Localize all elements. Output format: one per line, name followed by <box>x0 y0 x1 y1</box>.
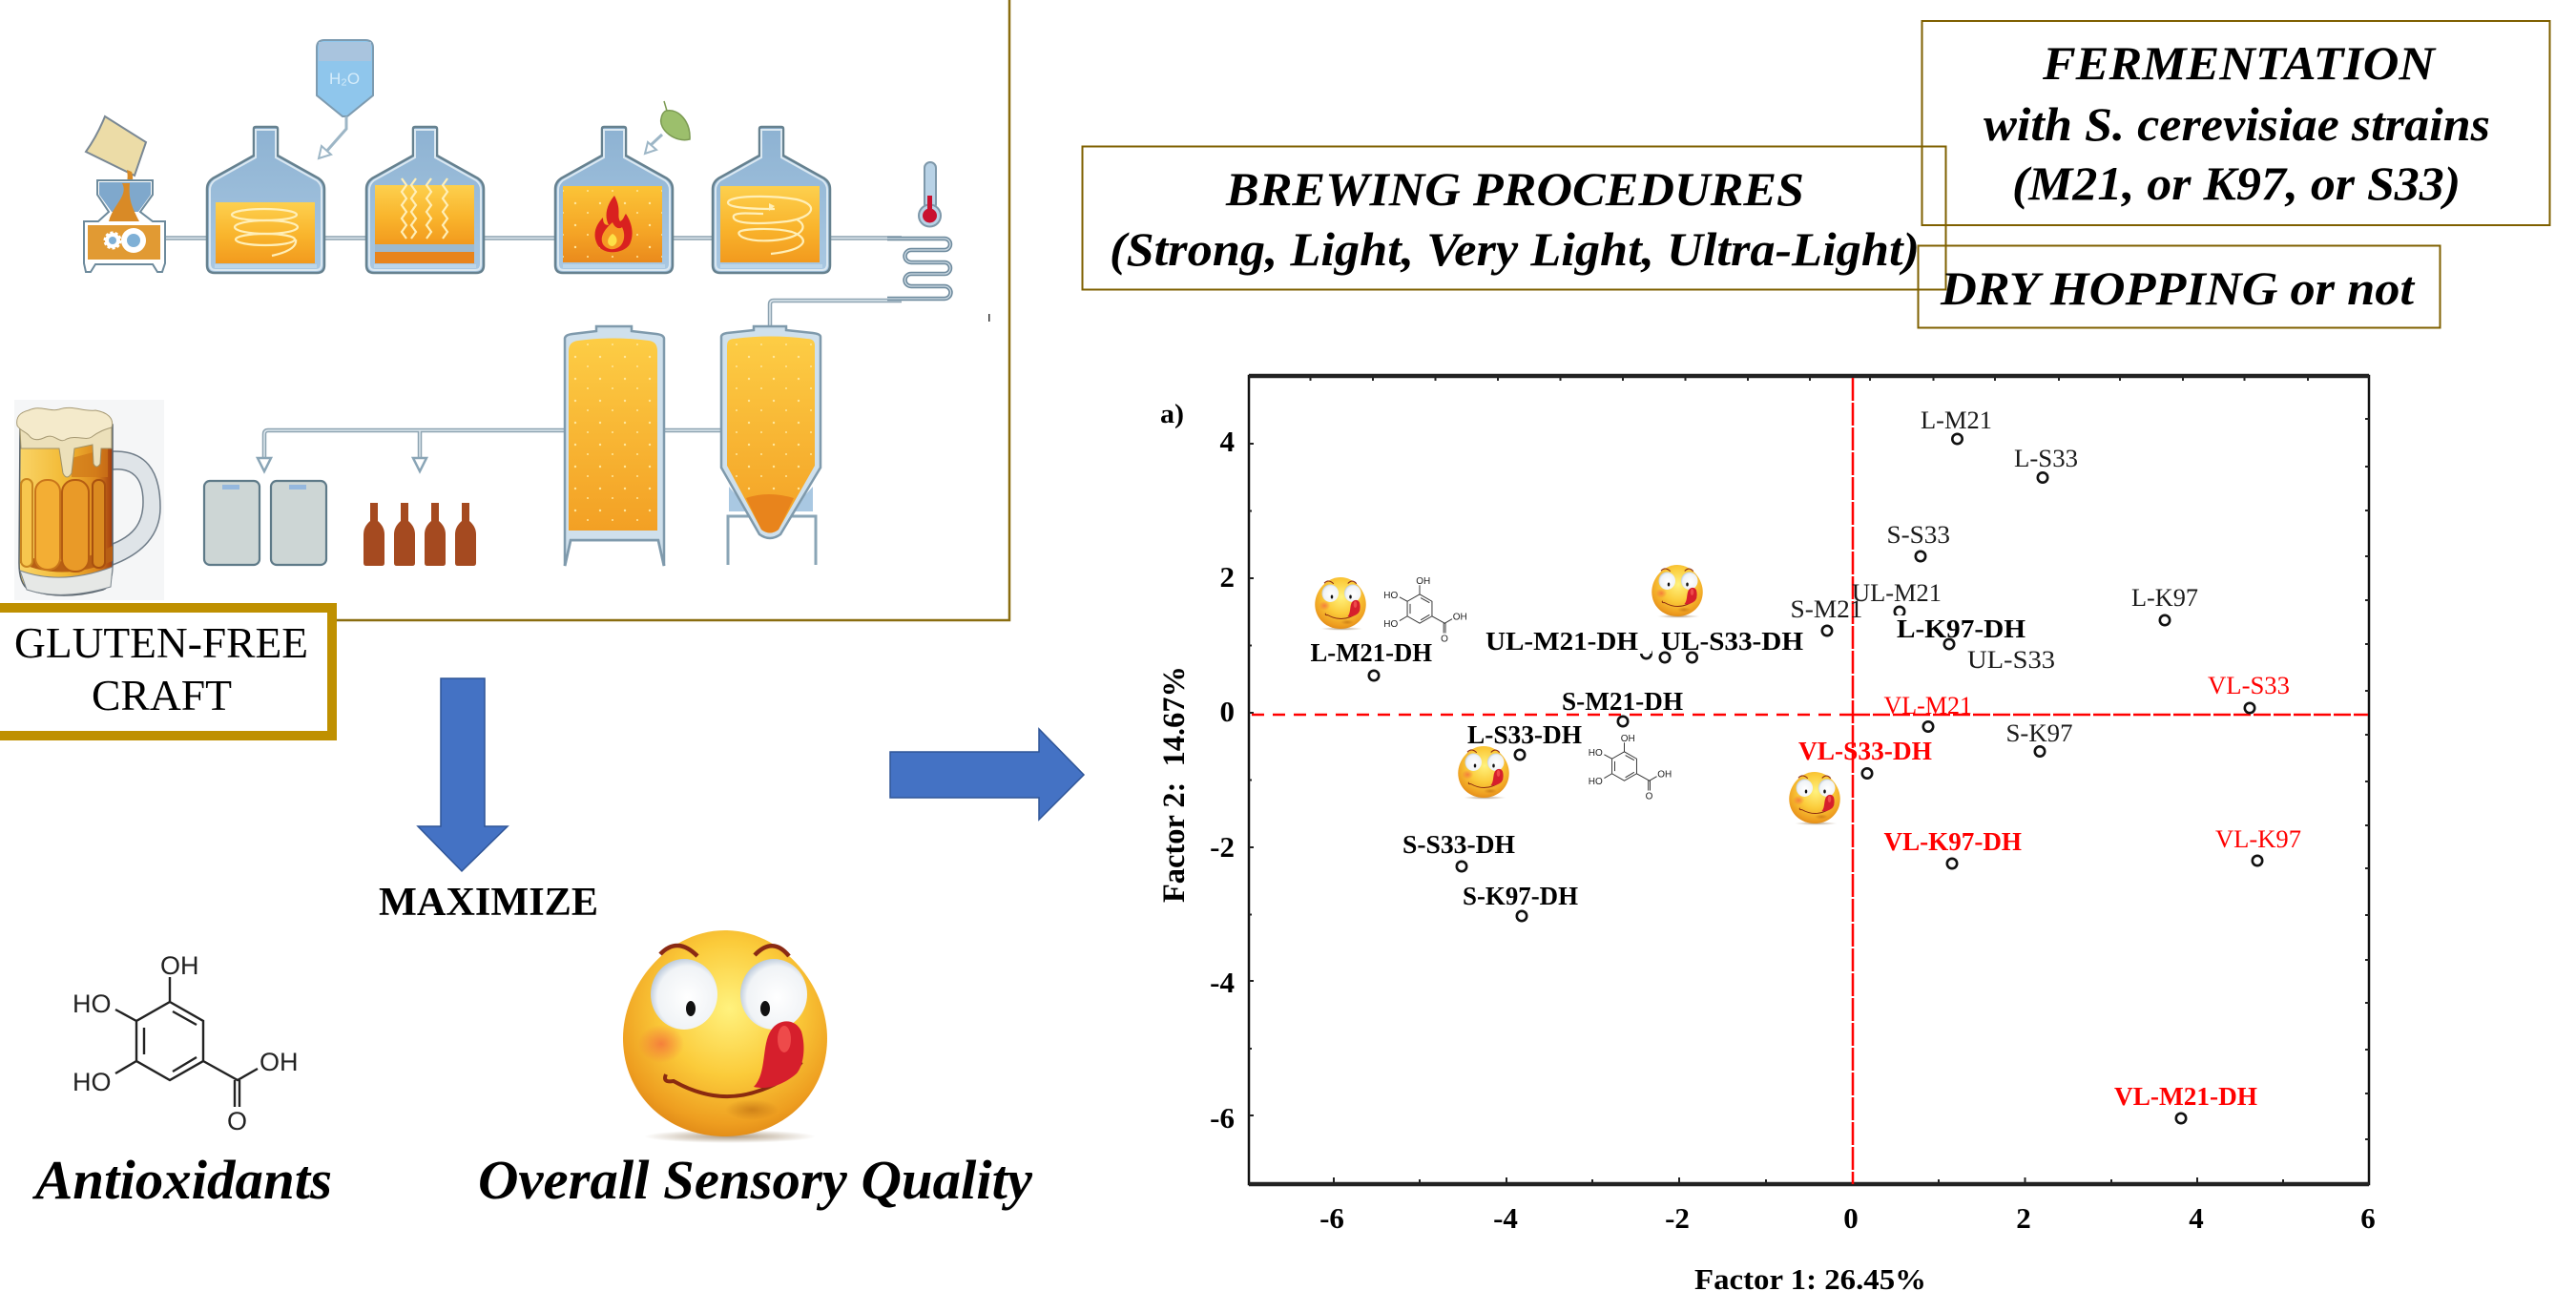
sample labels: regular: S-K97 <box>2005 719 2072 747</box>
icon: gallic acid molecule large: OH <box>160 951 198 980</box>
icon: grain sack <box>86 116 146 214</box>
icon: large smiley <box>623 930 827 1143</box>
vessel: conical fermenter <box>721 326 821 565</box>
x axis title: Factor 1: 26.45% <box>1694 1262 1926 1296</box>
icon: small gallic acid near L-M21-DH: OH <box>1416 576 1430 587</box>
pipes: brewhouse line <box>164 239 902 458</box>
icon: cooling coil <box>887 239 950 299</box>
x axis tick labels: 6 <box>2360 1201 2376 1235</box>
sample labels: dry-hopped bold <box>1311 614 2025 910</box>
sample labels: dry-hopped bold: UL-M21-DH <box>1485 627 1638 656</box>
y axis tick labels: -6 <box>1210 1101 1235 1135</box>
mug foam head <box>17 407 113 441</box>
label text line 1: GLUTEN-FREE <box>14 619 308 667</box>
sample labels: red regular: VL-M21 <box>1883 692 1972 719</box>
icon: gallic acid molecule large: O <box>227 1107 247 1135</box>
icon: arrow to kegs <box>258 458 271 471</box>
icon: kegs <box>204 481 326 565</box>
y axis title: Factor 2: 14.67% <box>1157 666 1192 903</box>
icon: arrow to bottles <box>413 458 426 471</box>
icon: smiley at L-S33-DH <box>1458 746 1509 800</box>
mug base <box>20 567 113 594</box>
vessel 4: whirlpool with spiral <box>713 127 830 273</box>
x axis tick labels: 0 <box>1843 1201 1859 1235</box>
icon: smiley at L-M21-DH <box>1315 577 1366 631</box>
box: fermentation: with S. cerevisiae strains <box>1984 97 2490 151</box>
vessel 3: boil kettle with flame <box>555 127 673 273</box>
box: fermentation <box>1922 21 2549 225</box>
vessel: maturation tank <box>565 326 664 566</box>
arrow: right to chart <box>890 729 1084 820</box>
box: brewing procedures: BREWING PROCEDURES <box>1225 162 1804 216</box>
icon: small gallic acid near S-M21-DH: OH <box>1621 734 1635 744</box>
label: overall sensory quality: Overall Sensory Quality <box>478 1149 1032 1211</box>
mug beer amber top <box>72 448 108 477</box>
x axis tick labels <box>1319 1201 2376 1235</box>
box: dry hopping <box>1918 246 2441 328</box>
label text line 2: CRAFT <box>92 672 232 719</box>
box: brewing procedures: (Strong, Light, Very Light, Ultra-Light) <box>1110 222 1920 276</box>
sample labels: regular: L-K97 <box>2131 584 2198 612</box>
y axis tick labels: -2 <box>1210 830 1235 864</box>
icon: small gallic acid near S-M21-DH: HO <box>1589 777 1603 787</box>
icon: small gallic acid near S-M21-DH: HO <box>1589 748 1603 759</box>
icon: beer mug <box>14 400 164 600</box>
arrow: maximize down <box>418 678 508 871</box>
mug body <box>19 425 113 595</box>
mug handle <box>113 451 160 565</box>
x axis tick labels: -6 <box>1319 1201 1344 1235</box>
icon: grain mill <box>84 180 165 272</box>
sample labels: regular: S-S33 <box>1887 521 1950 549</box>
sample labels: regular <box>1790 406 2198 747</box>
sample labels: regular: UL-M21 <box>1852 579 1942 607</box>
y axis tick labels: 0 <box>1219 695 1235 728</box>
sample labels: dry-hopped bold: S-S33-DH <box>1402 830 1515 859</box>
panel letter: a) <box>1160 400 1184 429</box>
icon: gallic acid molecule large: HO <box>73 989 111 1018</box>
y axis tick labels: 4 <box>1219 425 1235 458</box>
icon: water bag H2O <box>317 40 373 158</box>
icon: smiley at VL-S33-DH <box>1789 772 1840 825</box>
mug lower beer band <box>20 546 113 573</box>
sample labels: red dry-hopped bold: VL-S33-DH <box>1798 737 1932 765</box>
sample labels: dry-hopped bold: L-S33-DH <box>1467 720 1582 749</box>
box: brewing procedures <box>1082 147 1946 290</box>
icon: small gallic acid near S-M21-DH: O <box>1646 791 1653 802</box>
icon: gallic acid molecule large <box>73 951 298 1135</box>
sample labels: regular: L-M21 <box>1921 406 1992 434</box>
box: gluten-free craft label <box>0 608 332 736</box>
mug foam collar with drips <box>20 426 112 477</box>
icon: small gallic acid near L-M21-DH: HO <box>1383 619 1398 630</box>
sample labels: regular: S-M21 <box>1790 595 1862 623</box>
x axis tick labels: -2 <box>1665 1201 1690 1235</box>
sample labels: red regular: VL-S33 <box>2208 672 2290 699</box>
mark <box>988 314 990 322</box>
icon: smiley at UL-S33-DH <box>1652 565 1703 618</box>
mug panels <box>21 479 105 572</box>
sample labels: red dry-hopped bold: VL-M21-DH <box>2114 1082 2257 1111</box>
box: dry hopping: DRY HOPPING or not <box>1940 261 2416 315</box>
sample labels: dry-hopped bold: S-M21-DH <box>1562 687 1683 716</box>
sample labels: dry-hopped bold: S-K97-DH <box>1463 882 1578 910</box>
icon: small gallic acid near L-M21-DH: HO <box>1383 591 1398 601</box>
y axis tick labels: 2 <box>1219 560 1235 594</box>
box: fermentation: (M21, or K97, or S33) <box>2012 156 2461 210</box>
icon: small gallic acid near S-M21-DH: OH <box>1657 769 1672 780</box>
icon: small gallic acid near L-M21-DH <box>1383 576 1467 644</box>
sample points <box>1369 434 2262 1123</box>
box: fermentation: FERMENTATION <box>2042 36 2437 90</box>
plot frame <box>1249 376 2369 1184</box>
icon: water bag H2O: H₂O <box>329 70 360 88</box>
vessel 2: lauter tun with false bottom <box>366 127 484 273</box>
icon: hop cone <box>645 101 690 154</box>
sample labels: red dry-hopped bold: VL-K97-DH <box>1883 827 2022 856</box>
icon: gallic acid molecule large: OH <box>260 1048 298 1076</box>
sample labels: dry-hopped bold: L-K97-DH <box>1897 614 2025 643</box>
x axis tick labels: 2 <box>2016 1201 2031 1235</box>
zero reference lines <box>1252 714 1853 716</box>
icon: small gallic acid near L-M21-DH: OH <box>1453 612 1467 622</box>
panel: brewing process frame <box>84 0 1009 620</box>
icon: small gallic acid near L-M21-DH: O <box>1441 634 1448 644</box>
sample labels: dry-hopped bold: UL-S33-DH <box>1661 627 1803 656</box>
x axis tick labels: 4 <box>2189 1201 2204 1235</box>
label: antioxidants: Antioxidants <box>32 1149 332 1211</box>
sample labels: red dry-hopped bold <box>1798 737 2257 1111</box>
label: maximize: MAXIMIZE <box>379 881 598 925</box>
icon: small gallic acid near S-M21-DH <box>1589 734 1672 802</box>
chart: PCA score plot <box>1157 376 2376 1296</box>
sample labels: regular: UL-S33 <box>1967 646 2055 674</box>
sample labels: dry-hopped bold: L-M21-DH <box>1311 638 1432 667</box>
icon: gallic acid molecule large: HO <box>73 1068 111 1096</box>
y axis tick labels <box>1210 425 1235 1135</box>
sample labels: regular: L-S33 <box>2014 445 2078 472</box>
icon: bottles <box>364 503 476 566</box>
y axis tick labels: -4 <box>1210 966 1235 999</box>
sample labels: red regular <box>1883 672 2301 853</box>
x axis tick labels: -4 <box>1493 1201 1518 1235</box>
sample labels: red regular: VL-K97 <box>2215 825 2301 853</box>
icon: thermometer <box>919 162 941 227</box>
vessel 1: mash tun with stirring spiral <box>207 127 324 273</box>
